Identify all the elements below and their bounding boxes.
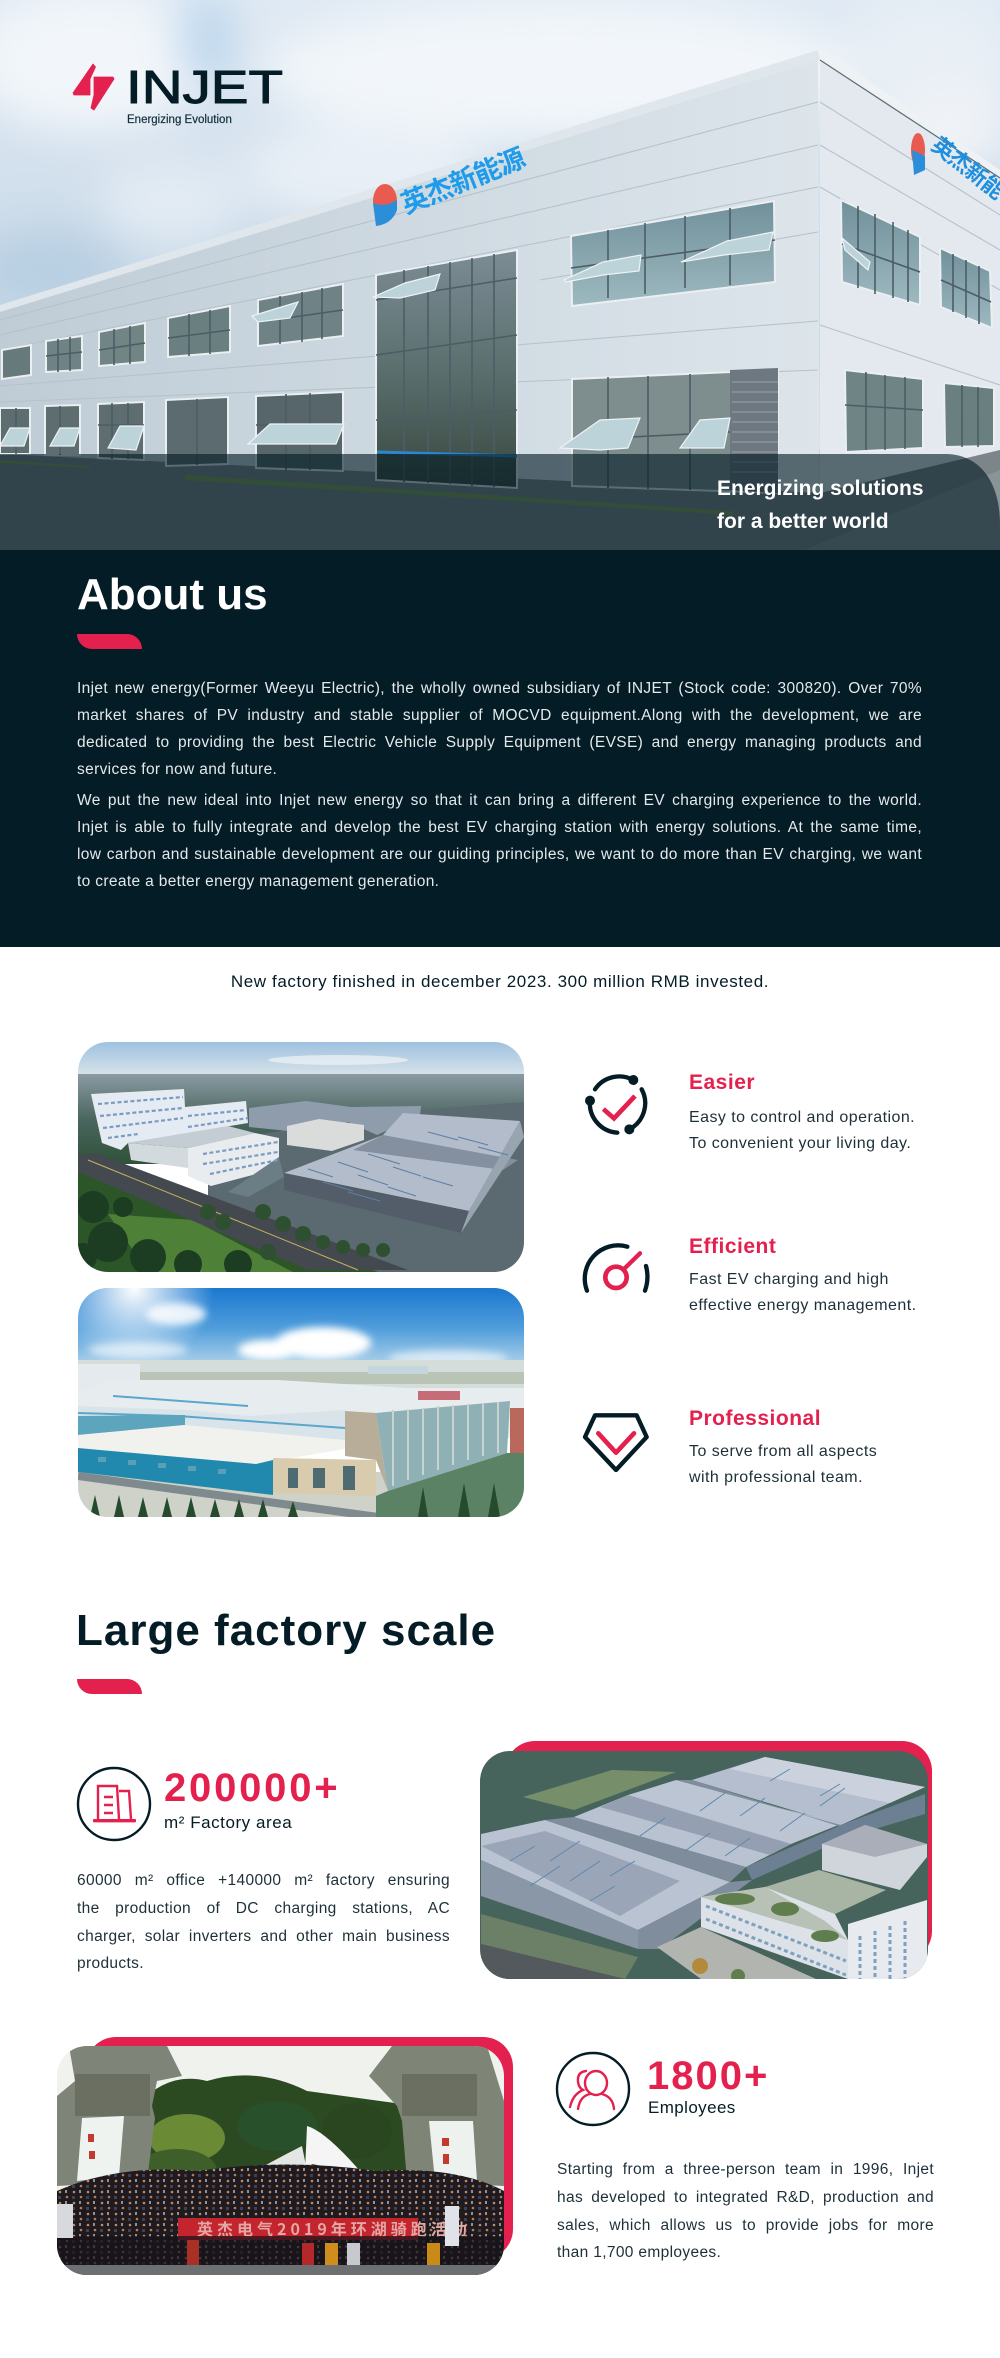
factory note: New factory finished in december 2023. 300 million RMB invested. — [231, 972, 769, 991]
text: professional — [689, 1443, 877, 1486]
about text: services for now and future. — [77, 761, 277, 778]
lower windows — [0, 250, 994, 493]
about text — [77, 680, 922, 890]
text: employees description: than 1,700 employees. — [557, 2244, 721, 2261]
window mullions — [16, 206, 991, 490]
tagline band — [0, 454, 1000, 550]
upper windows — [2, 200, 992, 379]
team photo — [57, 2046, 504, 2275]
stat: employees: 1800+ — [647, 2054, 769, 2098]
about text: We put the new ideal into Injet new energy so that it can bring a different EV charging experience to the world. — [77, 792, 922, 809]
accent tab — [77, 1679, 142, 1694]
accent tab — [77, 634, 142, 649]
text: employees description: sales, which allows us to provide jobs for more — [557, 2217, 934, 2234]
about text: dedicated to providing the best Electric Vehicle Supply Equipment (EVSE) and energy managing products and — [77, 734, 922, 751]
ground — [0, 450, 1000, 550]
heading: easier: Easier — [689, 1071, 755, 1094]
text: easier: To convenient your living day. — [689, 1134, 911, 1152]
road markings — [185, 475, 733, 515]
building sign: 英杰新能源 — [394, 136, 530, 221]
photo: team with red backing — [57, 2037, 513, 2275]
icon: diamond check — [582, 1413, 649, 1472]
icon: lightning mark — [73, 64, 114, 110]
building sign — [373, 128, 1000, 226]
text: factory description: charger, solar inverters and other main business — [77, 1928, 450, 1945]
about text: low carbon and sustainable development are our guiding principles, we want to do more than EV charging, we want — [77, 846, 922, 863]
heading: efficient: Efficient — [689, 1235, 776, 1258]
red backing — [505, 1741, 932, 1961]
aerial photo — [480, 1751, 928, 1979]
icon: gauge — [582, 1243, 650, 1293]
photo: factory complex with red backing — [480, 1741, 932, 1979]
text: employees description — [557, 2161, 934, 2261]
text: easier: Easy to control and operation. — [689, 1109, 915, 1126]
heading: professional: Professional — [689, 1407, 821, 1430]
team photo: 英杰电气2019年环湖骑跑活动 — [197, 2216, 471, 2240]
photo: factory with blue sky — [78, 1288, 524, 1517]
text: easier — [689, 1109, 915, 1152]
stat label: employees: Employees — [648, 2098, 736, 2117]
text: efficient: effective energy management. — [689, 1296, 917, 1314]
hero slogan: Energizing solutions — [717, 477, 924, 500]
red backing — [86, 2037, 513, 2259]
stat label: factory area: m² Factory area — [164, 1813, 292, 1832]
text: employees description: has developed to integrated R&D, production and — [557, 2189, 934, 2206]
about text: to create a better energy management generation. — [77, 873, 439, 890]
logo — [72, 61, 283, 126]
text: professional: with professional team. — [689, 1468, 863, 1486]
text: factory description: products. — [77, 1955, 144, 1972]
opened panes — [0, 232, 870, 450]
text: efficient — [689, 1271, 917, 1314]
wordmark: INJET — [126, 61, 283, 113]
text: efficient: Fast EV charging and high — [689, 1271, 889, 1288]
photo: new factory aerial render — [78, 1042, 524, 1272]
text: employees description: Starting from a three-person team in 1996, Injet — [557, 2161, 934, 2178]
hero photo: factory building — [0, 0, 1000, 550]
building walls — [0, 60, 820, 493]
icon: office building circle — [76, 1766, 152, 1842]
text: factory description: 60000 m² office +140000 m² factory ensuring — [77, 1872, 450, 1889]
about text: Injet is able to fully integrate and develop the best EV charging station with energy solutions. At the same time, — [77, 819, 922, 836]
tagline: Energizing Evolution — [127, 114, 232, 126]
blue lobby strip — [377, 452, 517, 456]
about text: Injet new energy(Former Weeyu Electric), the wholly owned subsidiary of INJET (Stock code: 300820). Over 70% — [77, 680, 922, 697]
louvre lines — [732, 382, 778, 472]
text: factory description: the production of DC charging stations, AC — [77, 1900, 450, 1917]
text: professional: To serve from all aspects — [689, 1443, 877, 1460]
heading: large factory scale: Large factory scale — [76, 1606, 496, 1655]
heading: about us: About us — [77, 570, 268, 619]
hero slogan — [717, 477, 924, 533]
text: factory description — [77, 1872, 450, 1972]
icon: employees circle — [556, 2052, 630, 2126]
icon: cycle check — [585, 1074, 648, 1135]
hero slogan: for a better world — [717, 510, 889, 533]
stat: factory area: 200000+ — [164, 1766, 340, 1810]
panel: about us — [0, 550, 1000, 947]
about text: market shares of PV industry and stable supplier of MOCVD equipment.Along with the development, we are — [77, 707, 922, 724]
